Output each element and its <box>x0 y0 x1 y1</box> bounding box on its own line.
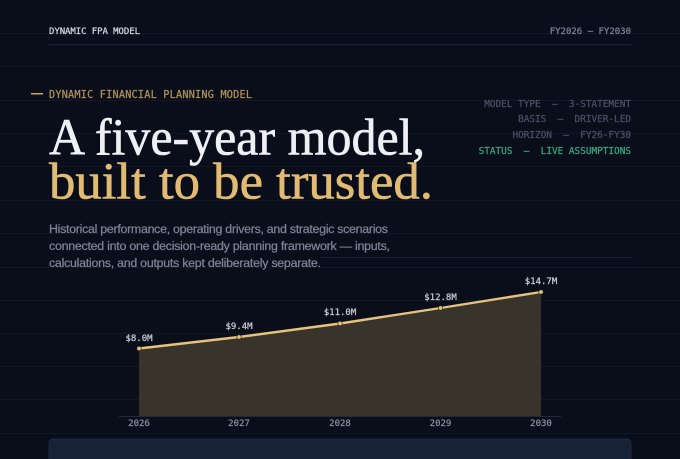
brand label: DYNAMIC FPA MODEL <box>49 27 140 37</box>
title line one: A five-year model, <box>49 110 425 166</box>
year labels: 2027 <box>228 419 250 429</box>
model metadata <box>479 99 631 157</box>
data points <box>137 290 543 351</box>
fiscal range: FY2026 — FY2030 <box>550 27 631 37</box>
year labels: 2026 <box>128 419 150 429</box>
value labels: $14.7M <box>525 277 558 287</box>
description line two: connected into one decision-ready planning framework — inputs, <box>49 239 390 253</box>
bottom panel <box>49 439 631 459</box>
year labels: 2028 <box>329 419 351 429</box>
year labels: 2030 <box>530 419 552 429</box>
top bar <box>49 27 631 45</box>
value labels <box>125 277 558 344</box>
eyebrow dash <box>31 93 43 94</box>
area chart <box>119 277 561 429</box>
top bar rule <box>49 44 631 45</box>
year labels: 2029 <box>430 419 451 429</box>
value labels: $8.0M <box>125 334 153 344</box>
value labels: $11.0M <box>324 308 357 318</box>
model type: MODEL TYPE — 3-STATEMENT <box>484 99 631 110</box>
area fill <box>139 292 541 416</box>
horizon: HORIZON — FY26-FY30 <box>512 130 631 141</box>
description line three: calculations, and outputs kept deliberately separate. <box>49 256 321 270</box>
value labels: $12.8M <box>424 293 457 303</box>
description line one: Historical performance, operating drivers, and strategic scenarios <box>49 222 388 236</box>
title <box>49 110 433 210</box>
description <box>49 222 390 270</box>
year labels <box>128 419 552 429</box>
axis <box>119 416 561 417</box>
eyebrow text: DYNAMIC FINANCIAL PLANNING MODEL <box>49 90 252 101</box>
title line two: built to be trusted. <box>49 154 433 210</box>
status: STATUS — LIVE ASSUMPTIONS <box>479 146 631 157</box>
basis: BASIS — DRIVER-LED <box>518 114 631 125</box>
value labels: $9.4M <box>225 322 253 332</box>
trend line <box>139 292 541 348</box>
divider <box>321 257 632 258</box>
